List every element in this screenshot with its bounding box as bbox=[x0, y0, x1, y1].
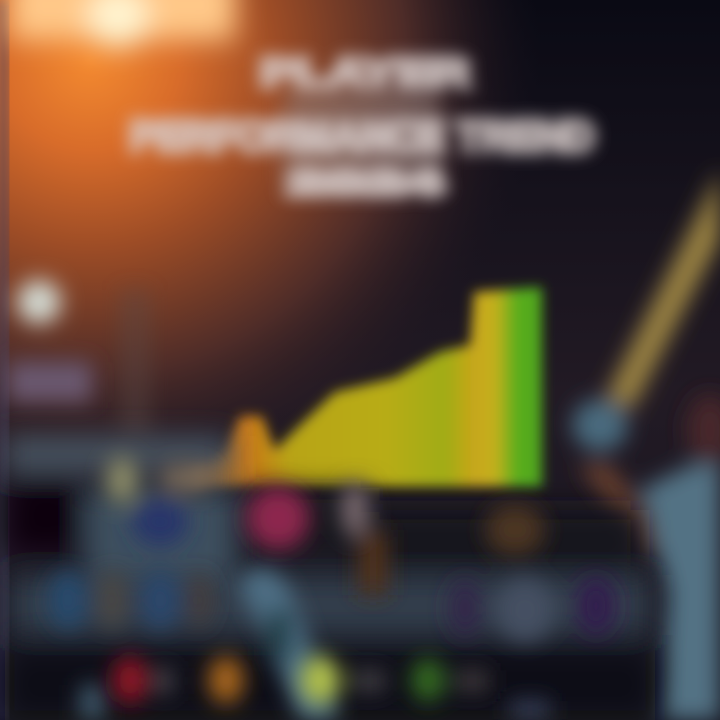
legend: average bbox=[208, 656, 244, 704]
title: PERFORMANCE TREND bbox=[130, 112, 594, 161]
legend: good bbox=[301, 656, 386, 704]
left stat icon and label bbox=[8, 280, 92, 402]
stats table colour cells bbox=[48, 456, 616, 642]
bar chart: rising performance bbox=[190, 287, 542, 487]
jersey bbox=[640, 465, 720, 720]
bat bbox=[606, 170, 720, 410]
title haze bbox=[285, 85, 440, 190]
batter at right bbox=[572, 170, 720, 720]
legend: excellent bbox=[411, 658, 489, 702]
title: 2024 bbox=[288, 164, 443, 202]
title bbox=[130, 51, 594, 202]
head bbox=[686, 394, 720, 466]
stats table panel bbox=[5, 436, 655, 720]
gloves bbox=[572, 399, 628, 451]
legend: low bbox=[112, 656, 173, 704]
legend bbox=[112, 656, 489, 704]
forearm bbox=[578, 460, 664, 558]
fielder silhouette in blue bbox=[80, 569, 550, 720]
stadium lights bbox=[10, 0, 235, 48]
title: PLAYER bbox=[260, 51, 470, 95]
